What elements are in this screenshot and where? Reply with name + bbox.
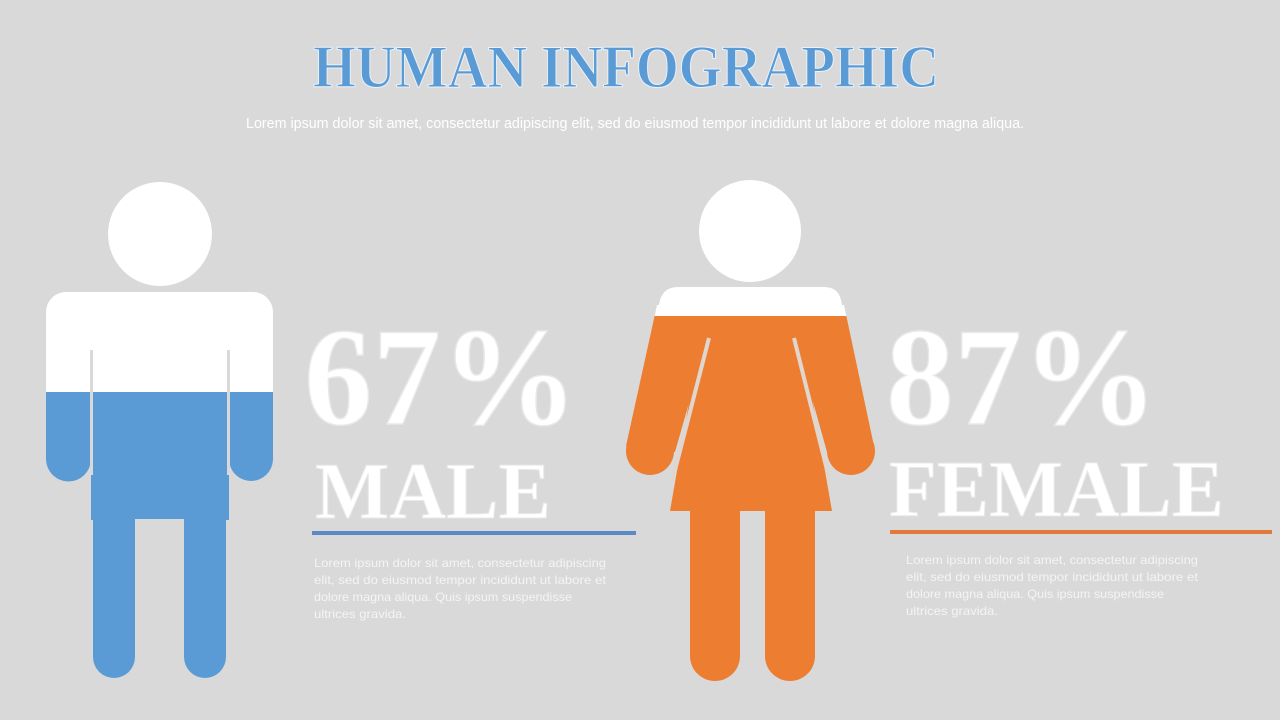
female description (906, 553, 1199, 618)
male description: Lorem ipsum dolor sit amet, consectetur adipiscing (314, 556, 606, 570)
female description: ultrices gravida. (906, 604, 998, 618)
icon: male figure (46, 182, 273, 678)
male description: ultrices gravida. (314, 607, 406, 621)
female description: Lorem ipsum dolor sit amet, consectetur adipiscing (906, 553, 1198, 567)
male underline (312, 531, 636, 535)
male percentage: 67% (304, 300, 578, 455)
female description: dolore magna aliqua. Quis ipsum suspendisse (906, 587, 1164, 601)
female percentage: 87% (886, 300, 1158, 455)
male label: MALE (315, 448, 551, 536)
female label: FEMALE (889, 446, 1224, 534)
female underline (890, 530, 1272, 534)
icon: female figure (626, 180, 875, 681)
female description: elit, sed do eiusmod tempor incididunt ut labore et (906, 570, 1199, 584)
title: HUMAN INFOGRAPHIC (313, 34, 939, 100)
male description: elit, sed do eiusmod tempor incididunt ut labore et (314, 573, 607, 587)
subtitle: Lorem ipsum dolor sit amet, consectetur adipiscing elit, sed do eiusmod tempor incididunt ut labore et dolore magna aliqua. (246, 115, 1024, 132)
male description (314, 556, 607, 621)
male description: dolore magna aliqua. Quis ipsum suspendisse (314, 590, 572, 604)
